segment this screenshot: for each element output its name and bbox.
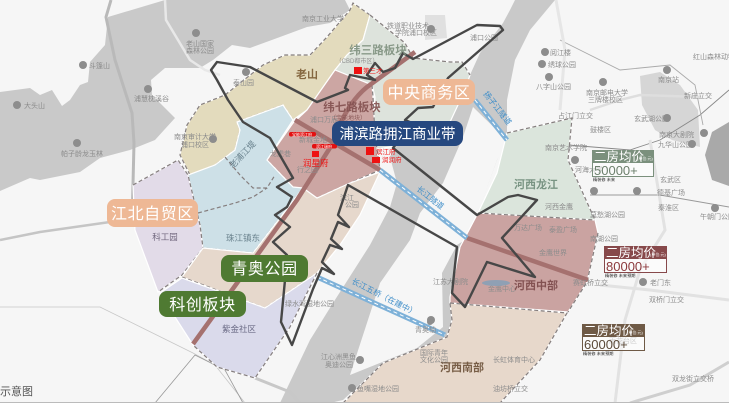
zone: 纬七路板块: [267, 70, 380, 198]
map place labels: 油坊桥立交: [493, 384, 528, 393]
zone labels: 纬七路板块: [323, 100, 381, 114]
price box: 河西南部 60000+: 二房均价: [584, 323, 635, 338]
pill: 青奥公园: [221, 255, 308, 282]
price box: 河西南部 60000+: (单位:元): [627, 329, 643, 335]
map place labels: 滨江: [340, 193, 354, 202]
zone labels: （CBD都市区）: [336, 57, 378, 65]
base map: river: [280, 0, 555, 403]
red landmarks: [289, 66, 402, 168]
price box: 河西龙江 50000+: [592, 149, 654, 183]
map place labels: 森林公园: [186, 46, 214, 55]
bridge labels: [350, 89, 514, 317]
pill: 科创板块: [159, 291, 246, 317]
map place labels: 泰山园: [233, 78, 254, 87]
map place labels: 江心洲黑鱼: [321, 352, 356, 361]
map place labels: 八字山公园: [536, 82, 571, 91]
zone: 科工园: [133, 160, 203, 292]
map place labels: 河西金鹰: [545, 202, 573, 211]
zone labels: 珠江镇东: [226, 233, 260, 243]
map place labels: 鼓楼区: [590, 125, 611, 134]
map place labels: 赛虹桥立交: [573, 278, 608, 287]
price box: 河西中部 80000+: [604, 245, 667, 279]
map place labels: 阅江楼: [550, 48, 571, 57]
map place labels: 斗篷山: [89, 61, 110, 70]
map place labels: 浦口公园: [470, 33, 498, 42]
caption: 示意图: [0, 384, 33, 398]
map place labels: 占江门立交: [558, 111, 593, 120]
map place labels: 帕子龄龙玉林: [61, 149, 103, 158]
map place labels: 九华山公园: [658, 140, 693, 149]
price box: 河西南部 60000+: [582, 323, 645, 357]
map place labels: 雨花台区: [609, 336, 637, 345]
zone: 河西南部: [343, 303, 567, 403]
pill: 中央商务区: 中央商务区: [387, 84, 471, 102]
zone: 河西龙江: [478, 118, 595, 220]
base map: mountains: [0, 0, 729, 191]
map place labels: 公园: [345, 201, 359, 209]
price box: 河西中部 80000+: 二房均价: [606, 245, 657, 260]
pill: 江北自贸区: 江北自贸区: [111, 205, 194, 223]
zone: 珠江镇东: [188, 105, 303, 253]
base map: Jiangxinzhou island: [350, 107, 507, 375]
map place labels: 南京审计大学: [174, 132, 216, 141]
price box: 河西中部 80000+: 精装修 未来预期: [605, 272, 635, 279]
map place labels: 新庄立交: [684, 91, 712, 100]
landmark: 河西 building icon: [482, 280, 510, 286]
map place labels: 双桥门立交: [649, 295, 684, 304]
bridges: blue tunnels: [317, 100, 507, 335]
pill: 江北自贸区: [107, 199, 198, 227]
map place labels: 大头山: [24, 101, 45, 110]
map place labels: 老山国家: [186, 39, 214, 48]
map place labels: 玄武湖公园: [634, 114, 669, 123]
zone labels: 老浦江堤: [227, 138, 258, 170]
zone labels: 河西南部: [440, 360, 484, 374]
zone: 纬三路板块: [335, 15, 470, 150]
pill: 科创板块: 科创板块: [169, 296, 236, 314]
map place labels: 老门东: [650, 278, 671, 287]
roads: dark red corridors: [193, 52, 588, 344]
map place labels: 文化公园: [420, 355, 448, 364]
price box: 河西龙江 50000+: 50000+: [594, 163, 638, 178]
pill: 浦滨路拥江商业带: 浦滨路拥江商业带: [340, 126, 456, 143]
map place labels: 浦口万辰: [310, 115, 338, 124]
map place labels: 金鹰中心: [488, 284, 516, 293]
map place labels: 江苏大剧院: [433, 277, 468, 286]
map place labels: 万达广场: [514, 223, 542, 232]
price box: 河西南部 60000+: 60000+: [584, 337, 628, 352]
red landmarks: 润星府: [303, 158, 329, 168]
pill: 中央商务区: [383, 79, 475, 105]
red landmarks: 滨江府: [376, 147, 396, 156]
map place labels: 泰盈广场: [549, 225, 577, 234]
map place labels: 行之园: [297, 165, 318, 174]
red landmarks: 润润府: [382, 155, 402, 164]
price box: 河西龙江 50000+: 二房均价: [594, 149, 645, 164]
map place labels: 浦口校区: [181, 140, 209, 149]
price box: 河西中部 80000+: 80000+: [606, 259, 650, 274]
map place labels: 新城金地: [299, 135, 327, 144]
map place labels: 河海大学: [575, 165, 603, 174]
map place labels: 鱼嘴湿地公园: [357, 384, 399, 393]
zone labels: 纬三路板块: [349, 43, 407, 57]
red landmarks: 第三才: [363, 66, 383, 75]
map place labels: 金鹰世界: [539, 248, 567, 257]
bridge labels: 长江五桥（在建中）: [350, 276, 419, 317]
zone labels: [152, 43, 558, 374]
zone: 河西中部: [450, 213, 598, 312]
zone: 老山: [180, 3, 370, 175]
plane outline: [211, 25, 537, 345]
pill: 浦滨路拥江商业带: [332, 121, 463, 146]
map place labels: 浦慧枕溪谷: [134, 94, 169, 103]
map place labels: 国际青年: [420, 348, 448, 357]
price box: 河西中部 80000+: (单位:元): [650, 251, 666, 257]
zone: 青奥公园 beige: [182, 172, 380, 308]
map place labels: 南京邮电大学: [586, 88, 628, 97]
map place labels: 奥迪公园: [325, 360, 353, 369]
zone: 紫金社区: [160, 273, 317, 378]
zone labels: （宝能地块）: [330, 114, 366, 122]
bridge labels: 扬子江隧道: [481, 89, 514, 127]
map place labels: 长虹体育中心: [493, 355, 535, 364]
map place labels: 玄武区: [660, 175, 681, 184]
zone labels: 河西龙江: [514, 177, 558, 191]
map place labels: 铁道职业技术: [387, 21, 429, 30]
map place labels: 南京站: [658, 75, 679, 84]
map place labels: 秦淮区: [658, 203, 679, 212]
map place labels: 莫愁湖公园: [590, 210, 625, 219]
map place labels: 学院浦口校区: [395, 28, 437, 37]
zone labels: 紫金社区: [222, 324, 256, 334]
zone labels: 老山: [296, 67, 318, 81]
map place labels: 南湖公园: [590, 234, 618, 243]
red landmarks: 滨江瑞府: [316, 143, 332, 149]
map place labels: 德基广场: [657, 188, 685, 197]
map place labels: 青奥轴: [415, 325, 436, 334]
zone labels: 科工园: [152, 232, 178, 242]
red landmarks: 宝能滨江府: [292, 131, 312, 137]
map place labels: 南京工业大学: [302, 14, 344, 23]
map place labels: 南京大剧院: [659, 130, 694, 139]
map place labels: 绣球公园: [548, 60, 576, 69]
bridge labels: 长江隧道: [415, 184, 446, 211]
pill: 青奥公园: 青奥公园: [231, 260, 298, 278]
price box: 河西龙江 50000+: 精装修 未来: [593, 176, 616, 183]
zone labels: 河西中部: [514, 278, 558, 292]
map place labels: 龙虎巷: [270, 149, 291, 158]
price box: 河西龙江 50000+: (单位:元): [637, 155, 653, 161]
price box: 河西南部 60000+: 精装修 未来预期: [583, 350, 613, 357]
map place labels: 三牌楼校区: [588, 95, 623, 104]
map place labels: 南京艺术学院: [545, 143, 587, 152]
map place labels: 绿水湾湿地公园: [285, 299, 334, 308]
map place labels: 双龙街立交桥: [672, 374, 714, 383]
